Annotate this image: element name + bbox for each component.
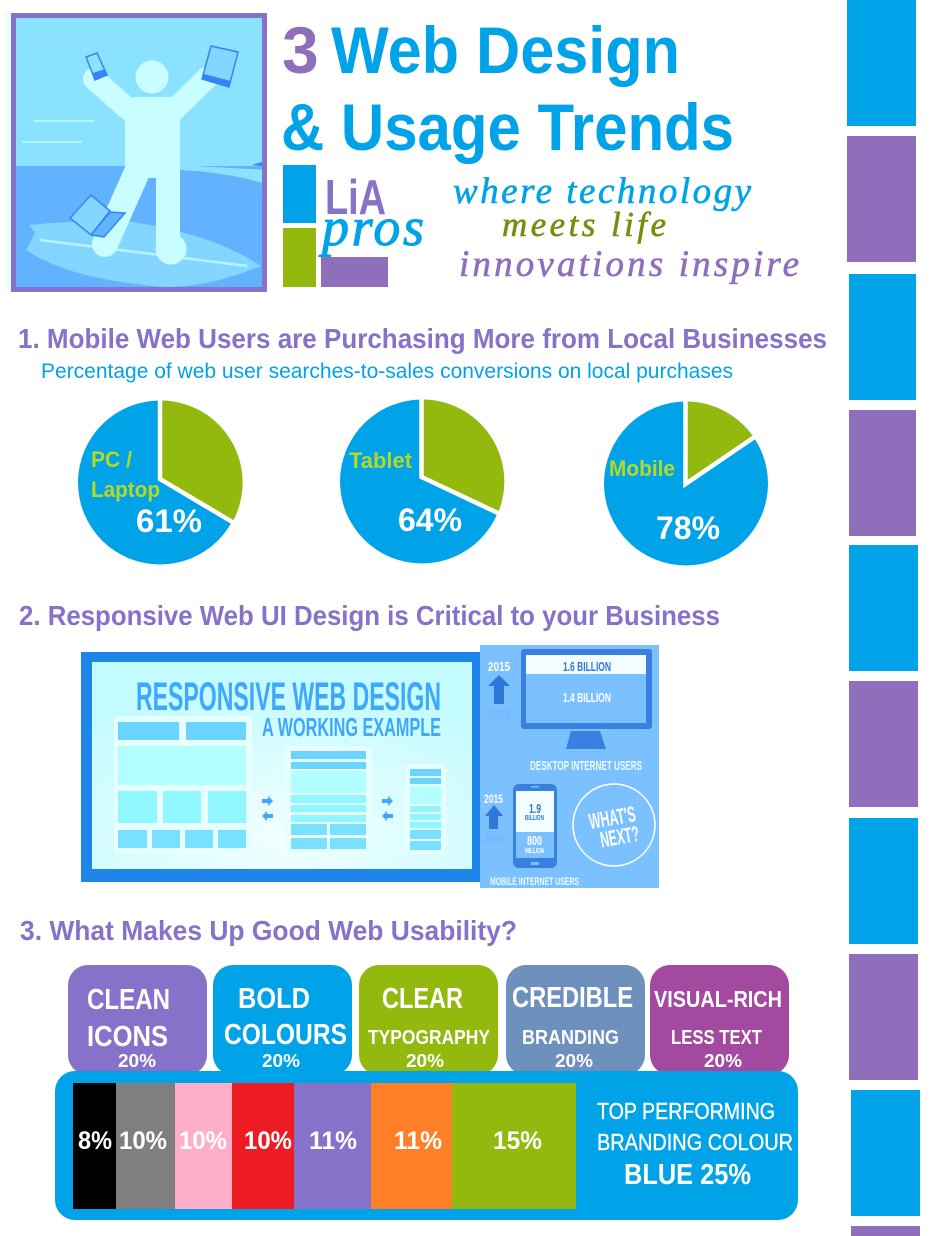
colour share bars xyxy=(73,1083,576,1209)
right side colour stripes xyxy=(847,0,920,1236)
card: clean icons: ICONS xyxy=(87,1021,168,1053)
tagline: where technology xyxy=(453,171,752,212)
phone layout wireframe xyxy=(405,764,446,854)
desktop monitor xyxy=(521,649,652,773)
card: credible branding: 20% xyxy=(555,1051,593,1071)
desktop monitor: 1.6 BILLION xyxy=(563,659,611,674)
panel heading xyxy=(136,675,441,742)
top performing colour callout xyxy=(597,1098,793,1191)
title: & Usage Trends xyxy=(281,90,734,164)
section 1 subheading: Percentage of web user searches-to-sales conversions on local purchases xyxy=(41,360,733,383)
card: visual-rich less text xyxy=(650,965,789,1075)
top performing colour callout: TOP PERFORMING xyxy=(597,1098,775,1124)
card: bold colours: BOLD xyxy=(238,983,310,1015)
title: Web Design xyxy=(331,13,680,87)
pie chart: Tablet 64%: 64% xyxy=(398,502,462,538)
tagline xyxy=(453,171,799,285)
mobile phone: MILLION xyxy=(525,848,544,855)
card: clean icons: 20% xyxy=(118,1051,156,1071)
mobile year arrow: 2015 xyxy=(484,792,503,806)
colour share bars: 10% xyxy=(179,1127,227,1155)
colour share bars: 15% xyxy=(493,1127,542,1155)
arrows between layouts xyxy=(262,796,393,821)
tagline: meets life xyxy=(502,205,666,244)
LiA pros logo: pros xyxy=(318,197,424,257)
pie chart: Tablet 64%: Tablet xyxy=(349,448,413,473)
card: bold colours xyxy=(213,965,352,1075)
pie chart: Tablet 64% xyxy=(340,399,504,564)
pie chart: PC / Laptop 61%: 61% xyxy=(136,503,202,539)
mobile phone: 800 xyxy=(527,833,542,848)
colour share bars: 10% xyxy=(244,1127,292,1155)
pie chart: Mobile 78%: 78% xyxy=(656,510,720,546)
card: clean icons: CLEAN xyxy=(87,984,170,1016)
card: clear typography xyxy=(359,965,498,1075)
mobile phone: 1.9 xyxy=(529,801,541,816)
LiA pros logo xyxy=(283,165,424,287)
card: clear typography: 20% xyxy=(406,1051,444,1071)
pie chart: PC / Laptop 61%: Laptop xyxy=(91,477,160,502)
card: bold colours: 20% xyxy=(262,1051,300,1071)
colour share bars: 11% xyxy=(394,1127,442,1155)
card: credible branding: CREDIBLE xyxy=(512,982,633,1014)
colour share bars: 10% xyxy=(119,1127,167,1155)
mobile year arrow: 2009 xyxy=(484,831,503,845)
what's next badge xyxy=(573,784,655,866)
card: credible branding: BRANDING xyxy=(522,1027,619,1049)
tagline: innovations inspire xyxy=(459,244,799,285)
mobile year arrow xyxy=(484,792,503,845)
section 1 heading: 1. Mobile Web Users are Purchasing More from Local Businesses xyxy=(18,323,827,354)
section 2 heading: 2. Responsive Web UI Design is Critical to your Business xyxy=(19,600,720,631)
title: 3 xyxy=(282,13,319,87)
pie chart: PC / Laptop 61%: PC / xyxy=(91,447,132,472)
branding colour bar panel xyxy=(55,1071,798,1220)
desktop year arrow xyxy=(488,659,510,722)
LiA pros logo: LiA xyxy=(325,171,386,225)
what's next badge: NEXT? xyxy=(598,821,641,852)
section 3 heading: 3. What Makes Up Good Web Usability? xyxy=(20,915,517,946)
hero illustration: person on surfboard with devices xyxy=(6,12,267,292)
panel heading: RESPONSIVE WEB DESIGN xyxy=(136,675,441,719)
internet users statistics panel xyxy=(480,645,659,888)
tablet layout wireframe xyxy=(285,746,372,854)
card: visual-rich less text: VISUAL-RICH xyxy=(654,986,782,1012)
card: credible branding xyxy=(506,965,645,1075)
mobile phone xyxy=(490,784,579,888)
card: visual-rich less text: 20% xyxy=(704,1051,742,1071)
desktop year arrow: 2015 xyxy=(488,659,510,674)
pie chart: Mobile 78% xyxy=(604,401,768,566)
desktop year arrow: 2009 xyxy=(488,707,510,722)
desktop monitor: 1.4 BILLION xyxy=(563,690,611,705)
pie chart: Mobile 78%: Mobile xyxy=(609,456,675,481)
colour share bars: 8% xyxy=(78,1127,112,1155)
card: clear typography: TYPOGRAPHY xyxy=(368,1027,491,1049)
desktop monitor: DESKTOP INTERNET USERS xyxy=(530,758,642,773)
pie chart: PC / Laptop 61% xyxy=(78,400,243,564)
card: visual-rich less text: LESS TEXT xyxy=(671,1027,762,1049)
card: clear typography: CLEAR xyxy=(382,983,463,1015)
top performing colour callout: BRANDING COLOUR xyxy=(597,1129,793,1155)
card: clean icons xyxy=(68,965,207,1075)
desktop layout wireframe xyxy=(114,716,252,854)
mobile phone: MOBILE INTERNET USERS xyxy=(490,876,579,888)
what's next badge: WHAT'S xyxy=(587,801,638,834)
mobile phone: BILLION xyxy=(525,815,544,822)
panel heading: A WORKING EXAMPLE xyxy=(262,712,441,742)
title xyxy=(281,13,734,164)
top performing colour callout: BLUE 25% xyxy=(624,1159,751,1191)
card: bold colours: COLOURS xyxy=(224,1019,347,1051)
colour share bars: 11% xyxy=(309,1127,357,1155)
responsive web design panel xyxy=(81,652,480,882)
